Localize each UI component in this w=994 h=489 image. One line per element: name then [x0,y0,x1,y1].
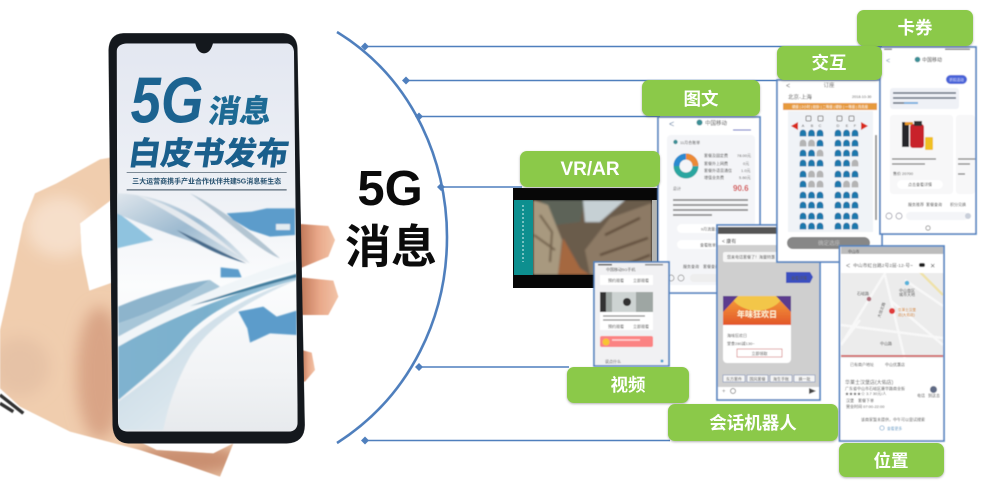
phone screen: 位置: 中山南区 [899,287,915,293]
phone screen: 会话机器人: 海味狂欢日 [727,332,747,338]
phone screen: 图文: 套餐查询 [703,263,719,269]
phone screen: 图文: 9月流量公告 [701,226,723,232]
phone screen: 位置: 华莱士汉堡 [898,307,916,312]
center heading: 5G消息: 消息 [345,221,437,273]
phone screen: 交互: E [846,123,849,128]
phone screen: 卡券: 点击查看详情 [908,181,932,187]
phone screen: 位置: 到这去 [928,392,940,398]
phone screen: 位置: 已有商户地址 [850,361,874,367]
phone screen: 位置: 该商家暂未提供，中午可以尝试搜索 [861,416,925,422]
cover title: 白皮书发布: 白皮书发布 [126,129,292,174]
phone screen: 交互: 硬座 | 2小时 | 软卧 | 二等座 | 硬卧 | 一等座 | 商务座 [792,104,869,109]
phone screen: 位置: 中山路 [880,340,892,346]
phone screen: 交互: 北京-上海 [788,93,812,101]
card label: 会话机器人 [668,404,838,441]
phone screen: 卡券: 20700 [902,171,914,176]
phone screen: 交互: F [854,123,857,128]
phone screen: 图文: 套餐外上网费 [704,160,728,166]
phone screen: 会话机器人: 查看详情 [791,274,807,280]
phone screen: 位置: 大信北路 [875,301,886,318]
phone screen: white paper cover [113,40,303,437]
phone screen: 卡券 [880,47,976,234]
phone screen: 交互: < [786,83,790,90]
phone screen: 交互: C [819,123,822,128]
phone screen: 卡券: 积分兑换 [950,201,966,207]
phone screen: 位置: 查看更多 [887,426,902,431]
cover title: 5G: 5G [131,64,203,137]
phone screen: 图文: 5.60元 [739,175,751,180]
phone screen: 视频: 立即观看 [633,323,649,329]
arc bracket [337,32,447,443]
phone screen: 图文: 服务查询 [683,263,699,269]
phone screen: 视频: 中国移动5G手机 [606,266,635,272]
cover subtitle: 三大运营商携手产业合作伙伴共建5G消息新生态 [132,177,281,186]
cover title: 消息: 消息 [206,86,275,132]
card label: VR/AR [520,151,660,187]
card label: 交互 [777,46,882,80]
VR/AR video panel [513,188,658,288]
phone screen: 视频 [594,262,669,366]
phone screen: 图文: 总计 [673,185,681,191]
phone screen: 交互: 确定选座 [818,239,840,247]
card label: 视频 [567,367,689,403]
phone screen: 卡券: 中国移动 [922,56,942,64]
phone screen: 会话机器人: 东方套件 [726,376,742,382]
center heading: 5G消息: 5G [357,162,423,216]
center heading: 5G消息 [345,162,437,273]
phone screen: 图文: 90.6 [733,184,749,193]
connector lines [361,42,882,444]
card label: 会话机器人: 会话机器人 [709,413,797,433]
phone screen: 图文: 中国移动 [705,119,728,127]
phone screen: 卡券: < [886,58,890,65]
phone screen: 视频: 预约观看 [608,277,624,283]
phone screen: 会话机器人 [717,225,820,400]
phone camera notch [195,42,213,53]
phone screen: 图文 [658,117,760,293]
phone screen: 位置: 中山市虹台路2号2层-12-号~ [853,262,913,269]
phone screen: 图文: 1.0元 [741,168,751,173]
card label: 图文: 图文 [684,89,719,109]
phone screen: 位置: 营业时间 07:00-22:00 [846,403,885,409]
phone screen: 图文: 11月合账单 [680,139,700,145]
card label: 图文 [642,80,760,116]
phone screen: 交互: A [802,123,805,128]
card label: VR/AR: VR/AR [560,159,620,180]
phone screen: 位置: 石岐路 [857,290,869,296]
phone screen: 卡券: 服务推荐 [908,201,924,207]
phone screen: 位置: ✕ [930,263,935,270]
phone screen: 会话机器人: 海生手账 [773,376,789,382]
phone screen: 图文: 0元 [743,161,749,166]
card label: 卡券: 卡券 [898,18,933,38]
hand holding phone illustration [0,33,338,477]
phone screen: 会话机器人: + [722,389,726,395]
phone screen: 卡券: 折扣活动 [949,77,964,82]
phone screen: 位置: 华莱士汉堡店(大佑店) [845,379,894,386]
phone screen: 图文: 增值业务费 [704,174,724,180]
card label: 交互: 交互 [812,53,846,73]
phone screen: 图文: 套餐外语音通信 [704,167,732,173]
phone body [109,33,305,443]
phone screen: 视频: 预约观看 [608,323,624,329]
card label: 位置 [839,443,944,477]
phone screen: 交互: D [837,123,840,128]
phone screen: 位置: 电话 [917,392,925,398]
card label: 位置: 位置 [874,451,908,471]
phone screen: 图文: < [669,119,674,129]
phone screen: 交互: 2018-10-30 [852,95,871,99]
phone screen: 位置: 店(大佑店) [898,312,915,317]
phone screen: 位置: < [846,263,850,270]
phone screen: 位置 [840,246,944,441]
phone screen: 图文: 78.00元 [737,153,751,158]
phone screen: 交互 [777,80,882,262]
card label: 视频: 视频 [610,375,646,395]
phone screen: 会话机器人: 立即领取 [752,350,768,356]
phone screen: 会话机器人: < 康有 [722,238,736,245]
card label: 卡券 [857,10,973,46]
hand [0,157,338,477]
phone screen: 位置: 广东省中山市石岐区康华路商业街 [845,385,905,391]
ribbons and cubes artwork [117,193,297,430]
phone screen: 位置: 城市天地 [899,291,915,297]
phone screen: 交互: 订座 [823,81,835,89]
phone screen: 位置: 中山优惠店 [885,361,905,367]
phone screen: 会话机器人: 年味狂欢日 [737,309,777,319]
phone screen: 会话机器人: 国风套餐 [750,376,766,382]
phone screen: 位置: 汉堡 套餐下单 [846,397,874,403]
phone screen: 卡券: 套餐查询 [926,201,942,207]
phone screen: 图文: 查看账单详情 [700,242,724,248]
phone screen: 位置: 中山市 [848,249,860,254]
phone screen: 图文: 套餐及固定费 [704,152,728,158]
phone screen: 会话机器人: 您来电话套餐了！海量特惠 [727,254,775,260]
phone screen: 交互: B [811,123,814,128]
phone screen: 会话机器人: 换一批 [798,376,810,382]
phone screen: 视频: 说点什么 [605,358,621,364]
phone screen: 卡券: 售价 [893,170,901,176]
phone screen: 位置: ★★★★☆ 3.7 30元/人 [845,390,886,396]
phone screen: 视频: 立即观看 [633,277,649,283]
phone screen: 会话机器人: 堂食280减130~ [727,340,755,346]
